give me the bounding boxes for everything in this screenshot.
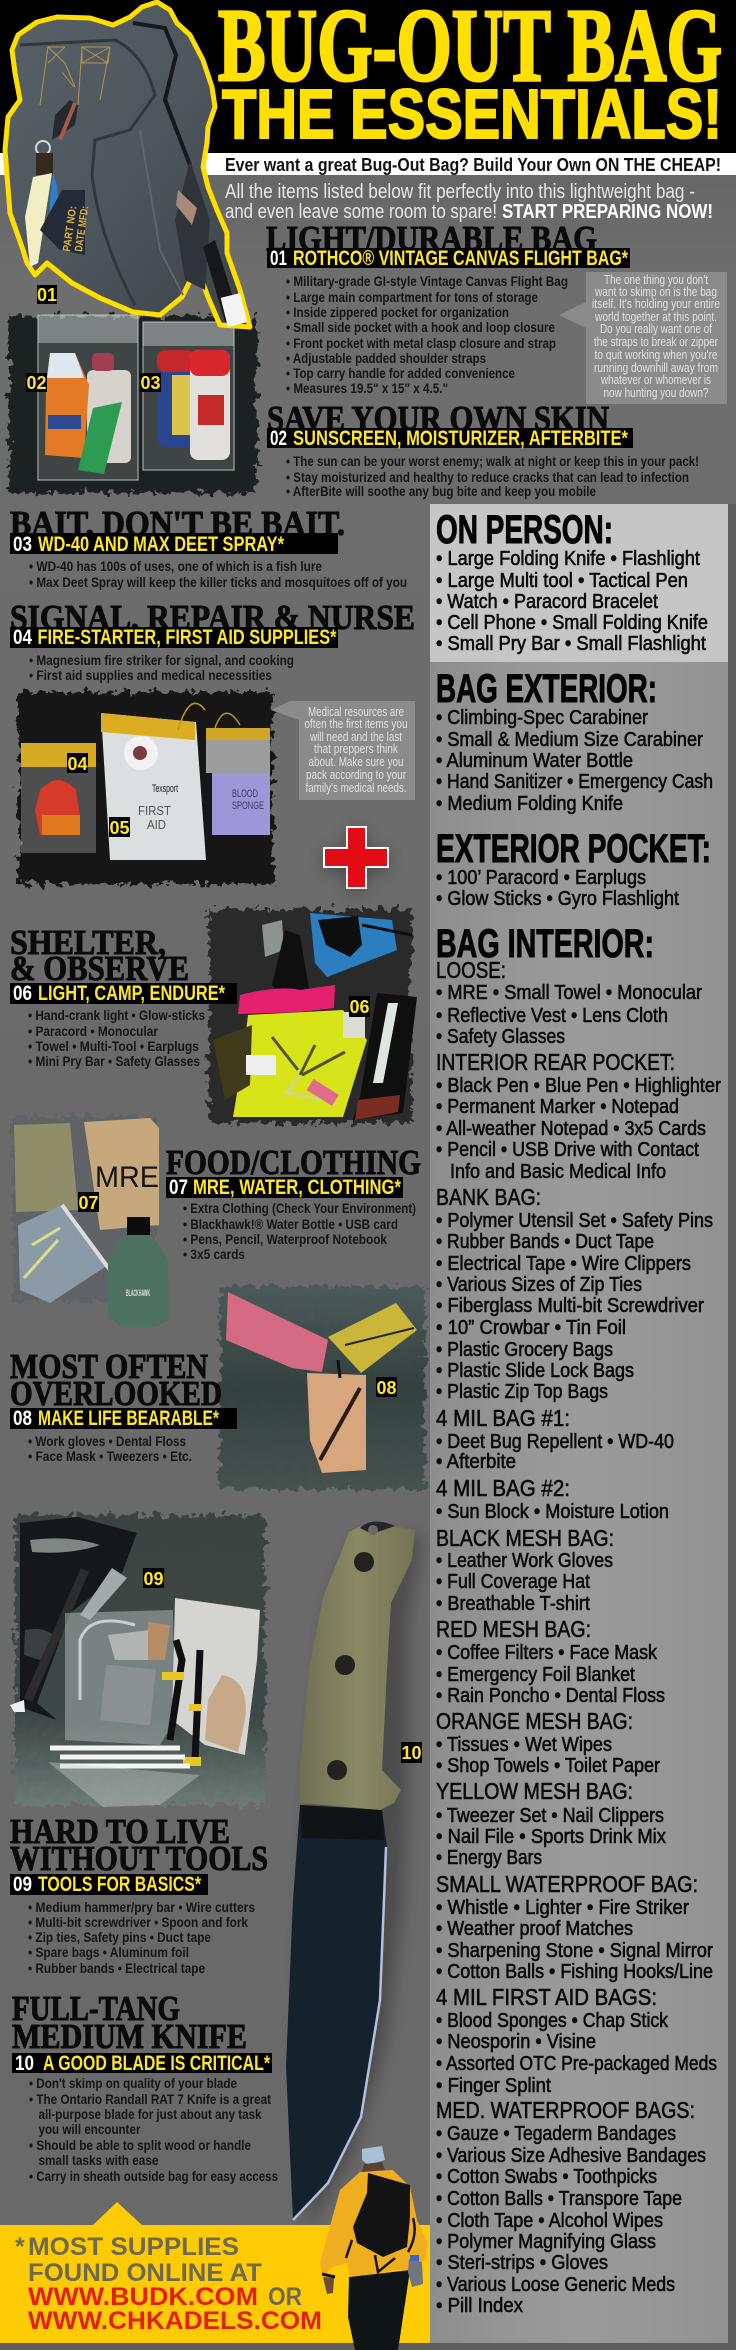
bullets 07: • Extra Clothing (Check Your Environment) <box>183 1200 416 1216</box>
bag interior: BAG INTERIOR: <box>436 922 654 966</box>
on person: ON PERSON: <box>436 508 613 552</box>
bag interior: • Rubber Bands • Duct Tape <box>436 1231 654 1253</box>
bag interior: 4 MIL BAG #1: <box>436 1405 570 1431</box>
bag interior: • Reflective Vest • Lens Cloth <box>436 1005 668 1027</box>
section 01: flight bag: 01 <box>270 247 287 270</box>
header black band <box>0 0 736 153</box>
bullets 08 <box>28 1433 192 1464</box>
bag interior: • Electrical Tape • Wire Clippers <box>436 1253 691 1275</box>
bullets 01 <box>286 273 568 396</box>
section 07: food: 07 <box>169 1176 188 1199</box>
badge 03: 03 <box>140 373 161 393</box>
callout: bag advice <box>559 272 727 404</box>
section 06: shelter: 06 <box>13 982 32 1005</box>
bullets 03: • WD-40 has 100s of uses, one of which is a fish lure <box>29 558 322 574</box>
bag interior: Info and Basic Medical Info <box>450 1161 666 1183</box>
bullets 06: • Hand-crank light • Glow-sticks <box>28 1007 205 1023</box>
badge 02: 02 <box>26 373 47 393</box>
bullets 01: • Adjustable padded shoulder straps <box>286 350 486 366</box>
bag interior: INTERIOR REAR POCKET: <box>436 1049 675 1075</box>
bullets 03 <box>29 558 407 590</box>
bag interior: • Energy Bars <box>436 1847 542 1869</box>
bag interior: 4 MIL BAG #2: <box>436 1475 570 1501</box>
section 04: signal <box>10 598 415 683</box>
callout: bag advice: now hunting you down? <box>604 386 709 400</box>
bullets 08: • Work gloves • Dental Floss <box>28 1433 186 1449</box>
bullets 07: • Pens, Pencil, Waterproof Notebook <box>183 1231 387 1247</box>
photo: light and camp gear <box>209 909 417 1123</box>
section 10: knife: MEDIUM KNIFE <box>12 2017 247 2056</box>
bullets 10: • Carry in sheath outside bag for easy access <box>29 2168 278 2184</box>
bullets 06: • Paracord • Monocular <box>28 1023 158 1039</box>
callout: medical resources: that preppers think <box>314 742 399 756</box>
section 09: tools: WITHOUT TOOLS <box>10 1839 268 1878</box>
section 08: overlooked: MAKE LIFE BEARABLE* <box>38 1407 220 1430</box>
bullets 10: • Don't skimp on quality of your blade <box>29 2075 237 2091</box>
bag interior: • Tweezer Set • Nail Clippers <box>436 1805 664 1827</box>
section 02: skin <box>267 399 699 499</box>
bag interior: • Plastic Grocery Bags <box>436 1339 613 1361</box>
section 03: bait: WD-40 AND MAX DEET SPRAY* <box>38 533 285 556</box>
bag interior: • Finger Splint <box>436 2075 551 2097</box>
bullets 04: • First aid supplies and medical necessities <box>29 667 272 683</box>
photo: MRE, bottle, clothing: MRE <box>95 1161 159 1194</box>
section 07: food: FOOD/CLOTHING <box>166 1143 421 1182</box>
bag interior: YELLOW MESH BAG: <box>436 1778 633 1804</box>
bullets 04: • Magnesium fire striker for signal, and cooking <box>29 652 294 668</box>
section 04: signal: FIRE-STARTER, FIRST AID SUPPLIES* <box>38 626 337 649</box>
bag interior: • Steri-strips • Gloves <box>436 2252 608 2274</box>
bullets 06: • Towel • Multi-Tool • Earplugs <box>28 1038 199 1054</box>
bullets 09: • Medium hammer/pry bar • Wire cutters <box>28 1899 255 1915</box>
bag interior: • Plastic Zip Top Bags <box>436 1381 608 1403</box>
rivets <box>327 1552 374 1780</box>
section 02: skin: SUNSCREEN, MOISTURIZER, AFTERBITE* <box>293 427 629 450</box>
bag interior: • MRE • Small Towel • Monocular <box>436 982 702 1004</box>
section 10: knife: FULL-TANG <box>12 1989 180 2028</box>
callout: medical resources: often the first items you <box>304 717 408 731</box>
section 04: signal: SIGNAL, REPAIR & NURSE <box>10 598 415 637</box>
bullets 02: • AfterBite will soothe any bug bite and keep you mobile <box>286 483 596 499</box>
bullets 01: • Small side pocket with a hook and loop closure <box>286 319 555 335</box>
intro text: and even leave some room to spare! <box>225 201 497 223</box>
section 09: tools <box>10 1812 268 1976</box>
section 04: signal: 04 <box>13 626 32 649</box>
bullets 09 <box>28 1899 255 1976</box>
footer yellow callout: MOST SUPPLIES <box>28 2233 239 2261</box>
bag interior: • Emergency Foil Blanket <box>436 1664 635 1686</box>
bag interior: • 10” Crowbar • Tin Foil <box>436 1317 626 1339</box>
bag exterior: • Small & Medium Size Carabiner <box>436 729 703 751</box>
bag interior: • Rain Poncho • Dental Floss <box>436 1685 665 1707</box>
callout: medical resources: pack according to your <box>306 768 406 782</box>
photo: flight bag <box>5 2 250 327</box>
bullets 10: small tasks with ease <box>38 2152 159 2168</box>
section 09: tools: TOOLS FOR BASICS* <box>38 1873 202 1896</box>
callout: medical resources: family's medical needs. <box>306 781 406 795</box>
bag interior: LOOSE: <box>436 957 506 983</box>
badge 09: 09 <box>143 1569 164 1589</box>
exterior pocket <box>436 827 711 910</box>
section 10: knife: A GOOD BLADE IS CRITICAL* <box>43 2052 271 2075</box>
bullets 01: • Measures 19.5" x 15" x 4.5." <box>286 380 448 396</box>
section 02: skin: SAVE YOUR OWN SKIN <box>267 399 609 438</box>
section 06: shelter: SHELTER, <box>10 923 166 962</box>
footer yellow callout: * <box>15 2233 25 2261</box>
bag interior: ORANGE MESH BAG: <box>436 1708 633 1734</box>
photo: first aid supplies: Texsport <box>152 783 178 795</box>
bag interior: • Pill Index <box>436 2295 523 2317</box>
bullets 01: • Military-grade GI-style Vintage Canvas Flight Bag <box>286 273 568 289</box>
section 03: bait: BAIT, DON'T BE BAIT. <box>10 504 345 543</box>
bag interior: RED MESH BAG: <box>436 1616 591 1642</box>
photo: first aid supplies <box>18 692 273 884</box>
photo: first aid supplies: AID <box>147 817 166 832</box>
callout: bag advice: whatever or whomever is <box>600 373 711 387</box>
badge 06: 06 <box>349 997 370 1017</box>
bag interior: 4 MIL FIRST AID BAGS: <box>436 1984 657 2010</box>
white subtitle strip <box>0 153 736 175</box>
photo: MRE, bottle, clothing: BLACKHAWK <box>126 1288 150 1298</box>
photo: tools <box>10 1515 265 1807</box>
bag interior: • Whistle • Lighter • Fire Striker <box>436 1897 689 1919</box>
section 08: overlooked: 08 <box>13 1407 32 1430</box>
photo: first aid supplies: BLOOD <box>232 788 258 800</box>
footer yellow callout: WWW.BUDK.COM <box>28 2283 258 2311</box>
footer yellow callout: FOUND ONLINE AT <box>28 2259 262 2287</box>
bag interior: MED. WATERPROOF BAGS: <box>436 2097 695 2123</box>
footer yellow callout: OR <box>268 2283 302 2311</box>
section 07: food: MRE, WATER, CLOTHING* <box>193 1176 402 1199</box>
callout: medical resources: Medical resources are <box>308 705 404 719</box>
badge 01: 01 <box>37 285 57 305</box>
badge 08: 08 <box>376 1378 397 1398</box>
bullets 09: • Zip ties, Safety pins • Duct tape <box>28 1929 211 1945</box>
bullets 07: • 3x5 cards <box>183 1246 245 1262</box>
section 10: knife <box>12 1989 278 2184</box>
on person: • Cell Phone • Small Folding Knife <box>436 612 708 634</box>
bullets 03: • Max Deet Spray will keep the killer ticks and mosquitoes off of you <box>29 574 407 590</box>
section 01: flight bag: ROTHCO® VINTAGE CANVAS FLIGHT BAG* <box>293 247 629 270</box>
bag interior: SMALL WATERPROOF BAG: <box>436 1871 698 1897</box>
bag interior: • Sun Block • Moisture Lotion <box>436 1501 669 1523</box>
section 06: shelter <box>10 923 237 1069</box>
section 10: knife: 10 <box>15 2052 34 2075</box>
bag interior: • Various Loose Generic Meds <box>436 2274 675 2296</box>
bag interior: • Plastic Slide Lock Bags <box>436 1360 634 1382</box>
on person <box>436 508 708 655</box>
icon: red cross <box>324 827 388 892</box>
bullets 04 <box>29 652 294 683</box>
bag interior: • Permanent Marker • Notepad <box>436 1096 679 1118</box>
section 06: shelter: & OBSERVE <box>10 949 189 988</box>
bullets 09: • Multi-bit screwdriver • Spoon and fork <box>28 1914 248 1930</box>
bullets 06: • Mini Pry Bar • Safety Glasses <box>28 1053 200 1069</box>
bag interior: • Polymer Magnifying Glass <box>436 2231 656 2253</box>
bag exterior: • Climbing-Spec Carabiner <box>436 707 648 729</box>
bag interior: • Shop Towels • Toilet Paper <box>436 1755 660 1777</box>
title <box>218 0 722 153</box>
bullets 01: • Inside zippered pocket for organization <box>286 304 509 320</box>
bag interior: • Coffee Filters • Face Mask <box>436 1642 658 1664</box>
bag interior: • Polymer Utensil Set • Safety Pins <box>436 1210 713 1232</box>
bag interior: BLACK MESH BAG: <box>436 1525 614 1551</box>
bullets 09: • Spare bags • Aluminum foil <box>28 1944 189 1960</box>
badge 10: 10 <box>401 1743 422 1763</box>
bag interior: • Various Size Adhesive Bandages <box>436 2145 706 2167</box>
bag interior: • All-weather Notepad • 3x5 Cards <box>436 1118 706 1140</box>
section 02: skin: 02 <box>270 427 287 450</box>
intro text <box>225 181 713 223</box>
callout: medical resources <box>271 701 415 800</box>
bullets 01: • Large main compartment for tons of storage <box>286 289 538 305</box>
bullets 01: • Top carry handle for added convenience <box>286 365 515 381</box>
section 03: bait: 03 <box>13 533 32 556</box>
bag interior: • Full Coverage Hat <box>436 1571 590 1593</box>
badge 07: 07 <box>78 1193 99 1213</box>
bag interior: • Sharpening Stone • Signal Mirror <box>436 1940 713 1962</box>
bullets 10 <box>29 2075 278 2184</box>
bullets 06 <box>28 1007 205 1069</box>
photo: first aid supplies: SPONGE <box>232 800 264 812</box>
bag interior: • Afterbite <box>436 1451 516 1473</box>
callout: bag advice: The one thing you don't <box>604 273 708 287</box>
bag interior: • Safety Glasses <box>436 1026 565 1048</box>
bag interior: • Deet Bug Repellent • WD-40 <box>436 1431 674 1453</box>
callout: medical resources: about. Make sure you <box>308 755 404 769</box>
bullets 10: you will encounter <box>38 2121 141 2137</box>
bullets 10: • The Ontario Randall RAT 7 Knife is a great <box>29 2091 271 2107</box>
bag interior <box>436 922 721 2317</box>
bullets 08: • Face Mask • Tweezers • Etc. <box>28 1448 192 1464</box>
section 07: food <box>166 1143 421 1262</box>
exterior pocket: • 100’ Paracord • Earplugs <box>436 867 646 889</box>
section 06: shelter: LIGHT, CAMP, ENDURE* <box>38 982 226 1005</box>
bag interior: • Fiberglass Multi-bit Screwdriver <box>436 1295 704 1317</box>
bullets 09: • Rubber bands • Electrical tape <box>28 1960 205 1976</box>
section 09: tools: 09 <box>13 1873 32 1896</box>
photo: mesh bags <box>220 1286 425 1489</box>
bullets 01: • Front pocket with metal clasp closure and strap <box>286 335 556 351</box>
bag interior: • Neosporin • Visine <box>436 2031 596 2053</box>
callout: medical resources: will need and the last <box>309 730 402 744</box>
on person: • Large Multi tool • Tactical Pen <box>436 570 688 592</box>
bag interior: • Tissues • Wet Wipes <box>436 1734 612 1756</box>
bag interior: • Nail File • Sports Drink Mix <box>436 1826 666 1848</box>
bullets 10: all-purpose blade for just about any task <box>38 2106 262 2122</box>
bag interior: • Leather Work Gloves <box>436 1550 613 1572</box>
bag interior: • Various Sizes of Zip Ties <box>436 1274 642 1296</box>
photo: flight bag: PART NO: <box>61 205 79 252</box>
bag interior: • Cotton Balls • Fishing Hooks/Line <box>436 1961 713 1983</box>
photo: sunscreen bags and sprays <box>9 315 257 493</box>
bullets 07: • Blackhawk!® Water Bottle • USB card <box>183 1216 398 1232</box>
bag interior: BANK BAG: <box>436 1184 541 1210</box>
section 01: flight bag <box>266 219 630 396</box>
icon: knife <box>286 1521 423 2229</box>
section 03: bait <box>10 504 407 590</box>
photo: MRE, bottle, clothing <box>13 1116 169 1327</box>
exterior pocket: • Glow Sticks • Gyro Flashlight <box>436 888 679 910</box>
section 01: flight bag: LIGHT/DURABLE BAG <box>266 219 597 258</box>
footer yellow callout <box>0 2202 736 2350</box>
on person: • Large Folding Knife • Flashlight <box>436 548 700 570</box>
bullets 10: • Should be able to split wood or handle <box>29 2137 251 2153</box>
bag interior: • Cotton Swabs • Toothpicks <box>436 2166 657 2188</box>
footer yellow callout: WWW.CHKADELS.COM <box>28 2307 322 2335</box>
section 09: tools: HARD TO LIVE <box>10 1812 230 1851</box>
bag exterior: • Aluminum Water Bottle <box>436 750 633 772</box>
bag exterior: • Medium Folding Knife <box>436 793 623 815</box>
section 08: overlooked <box>10 1347 237 1464</box>
photo: first aid supplies: FIRST <box>138 803 171 818</box>
bag interior: • Pencil • USB Drive with Contact <box>436 1139 699 1161</box>
section 08: overlooked: OVERLOOKED <box>10 1374 222 1413</box>
bag interior: • Blood Sponges • Chap Stick <box>436 2010 669 2032</box>
bag interior: • Breathable T-shirt <box>436 1593 590 1615</box>
bag interior: • Cloth Tape • Alcohol Wipes <box>436 2210 663 2232</box>
bullets 07 <box>183 1200 416 1262</box>
bullets 02 <box>286 453 699 499</box>
section 08: overlooked: MOST OFTEN <box>10 1347 208 1386</box>
photo: flight bag: DATE MFD: <box>73 205 91 252</box>
bag exterior <box>436 667 713 815</box>
on person: • Watch • Paracord Bracelet <box>436 591 658 613</box>
on person: • Small Pry Bar • Small Flashlight <box>436 633 706 655</box>
bag interior: • Cotton Balls • Transpore Tape <box>436 2188 682 2210</box>
bag interior: • Gauze • Tegaderm Bandages <box>436 2123 676 2145</box>
hiker figure <box>320 2146 428 2350</box>
panel: item checklist <box>430 504 736 2350</box>
bag interior: • Weather proof Matches <box>436 1918 633 1940</box>
badge 05: 05 <box>109 818 130 838</box>
badge 04: 04 <box>67 754 88 774</box>
